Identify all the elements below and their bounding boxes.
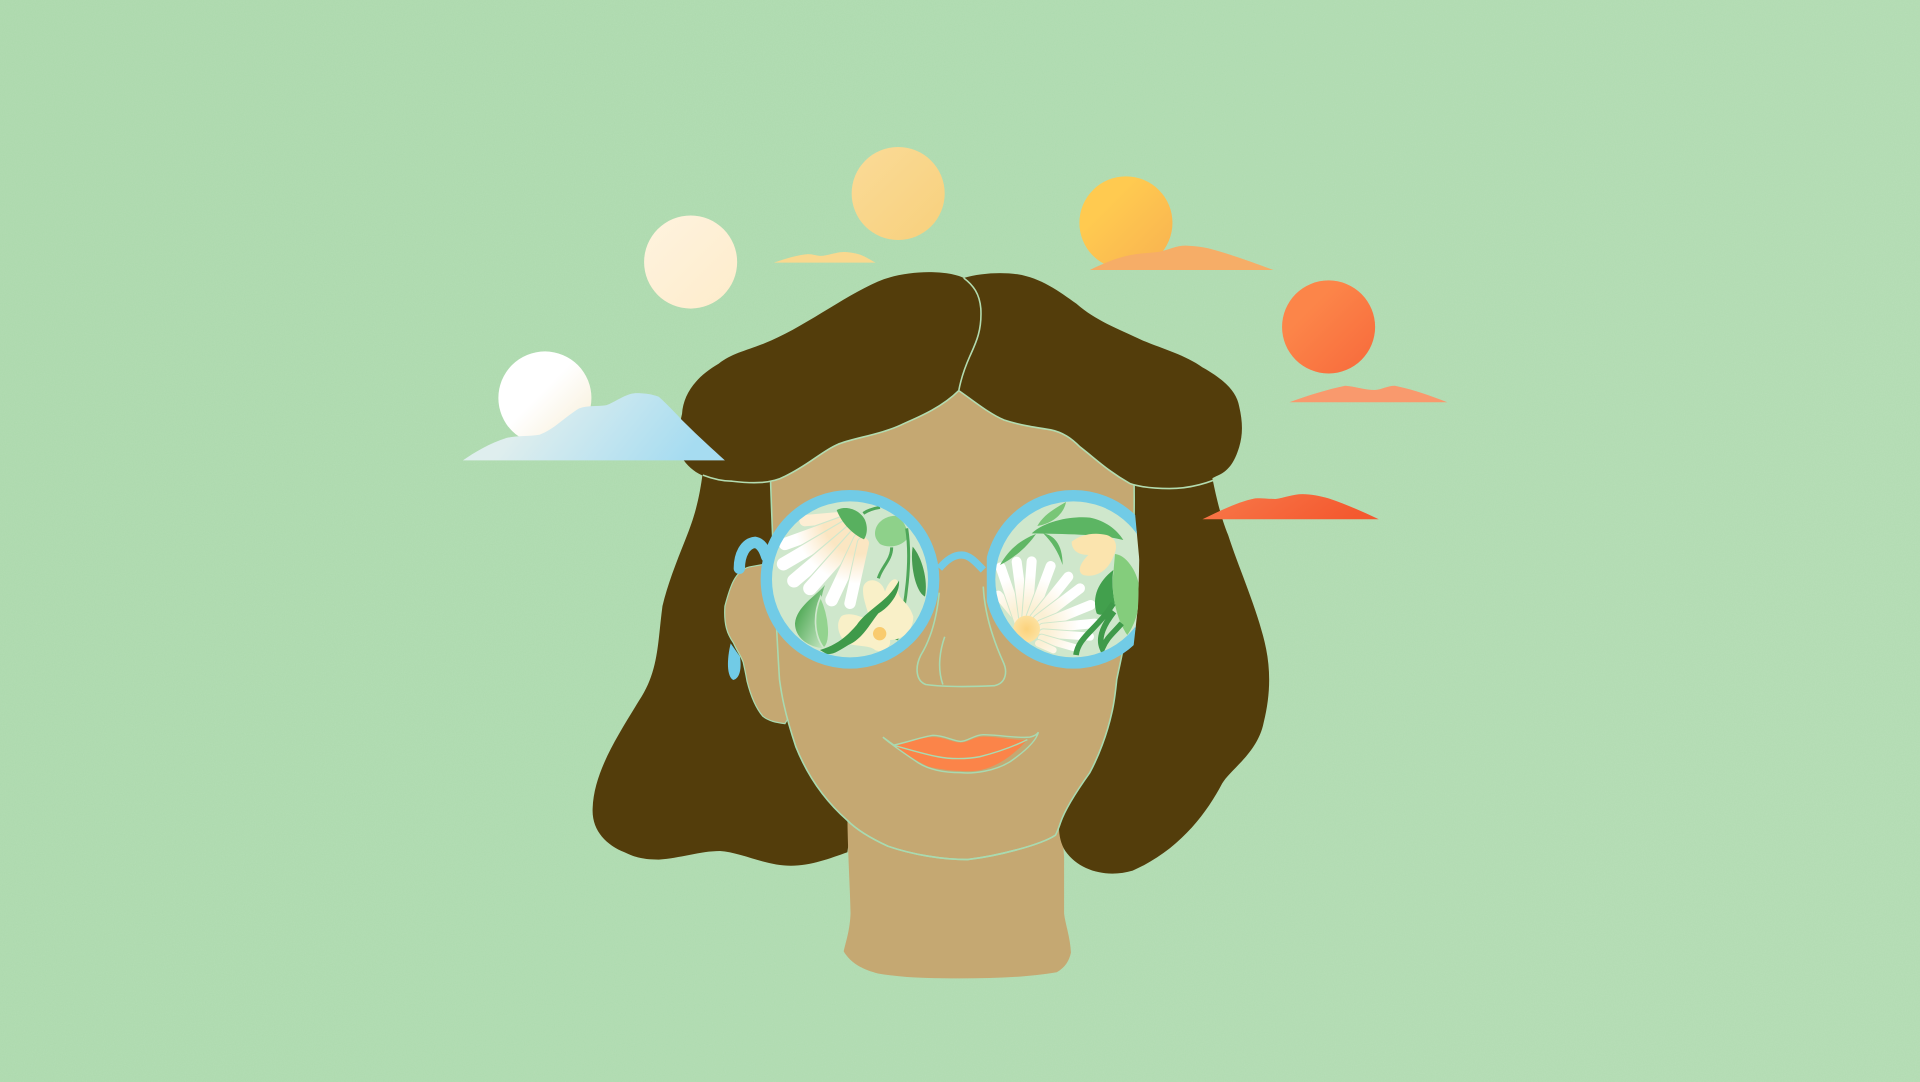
ear: [725, 561, 808, 724]
illustration: sun path and portrait: [463, 147, 1447, 978]
lip shape: [894, 737, 1027, 771]
hair: back right: [1059, 471, 1269, 874]
sun 3: pale yellow sun: [852, 147, 945, 240]
hair fringe: left: [678, 272, 981, 483]
face: [770, 382, 1135, 860]
left lens: leaf cap: [837, 508, 867, 539]
glasses: [728, 496, 1157, 680]
lip outline and smile line: [883, 732, 1038, 773]
cloud: blue with white sun: [463, 393, 725, 460]
left lens: stems: [863, 507, 909, 640]
left lens: big leaf: [795, 585, 825, 648]
hair parting and fringe line: [703, 278, 1228, 489]
right lens: cream flower: [1072, 534, 1116, 576]
left lens: dark squiggle leaf: [820, 581, 899, 654]
left lens: [772, 501, 928, 658]
nose: [917, 587, 1006, 687]
right lens: big right leaf: [1113, 554, 1140, 635]
cloud: orange: [1090, 246, 1273, 270]
right lens: daisy centre: [1013, 616, 1040, 642]
jaw and neck line: [847, 820, 1056, 860]
bridge: [939, 555, 983, 570]
earring drop: [728, 643, 741, 680]
right lens: dark stem and leaf: [1076, 603, 1122, 655]
left lens: light leaf: [816, 597, 829, 648]
right frame: [990, 496, 1157, 663]
sun 4: golden sun: [1079, 176, 1172, 269]
left lens: dark leaf: [912, 547, 926, 597]
left lens: flower centre: [873, 627, 886, 640]
left lens: cream flower: [838, 579, 913, 651]
hair: back left: [593, 471, 857, 866]
cloud: red: [1202, 494, 1379, 519]
sun 5: orange sun: [1282, 280, 1375, 373]
right lens: dark leaf: [1095, 570, 1115, 615]
left lens: fan of daisy petals: [783, 517, 863, 603]
sun 2: cream sun: [644, 216, 737, 309]
neck: [844, 808, 1071, 978]
lips: [883, 732, 1038, 773]
cloud: small yellow: [774, 252, 876, 263]
cloud: salmon: [1289, 386, 1447, 402]
right lens: [995, 501, 1140, 658]
left frame: [766, 496, 934, 663]
right lens: daisy petals: [998, 561, 1095, 650]
glasses temple arm: [739, 542, 767, 568]
hair fringe: right: [959, 273, 1242, 489]
left lens: round leaf: [875, 516, 907, 546]
sun 1: white sun: [498, 351, 591, 444]
right lens: green leaves: [1032, 517, 1123, 540]
